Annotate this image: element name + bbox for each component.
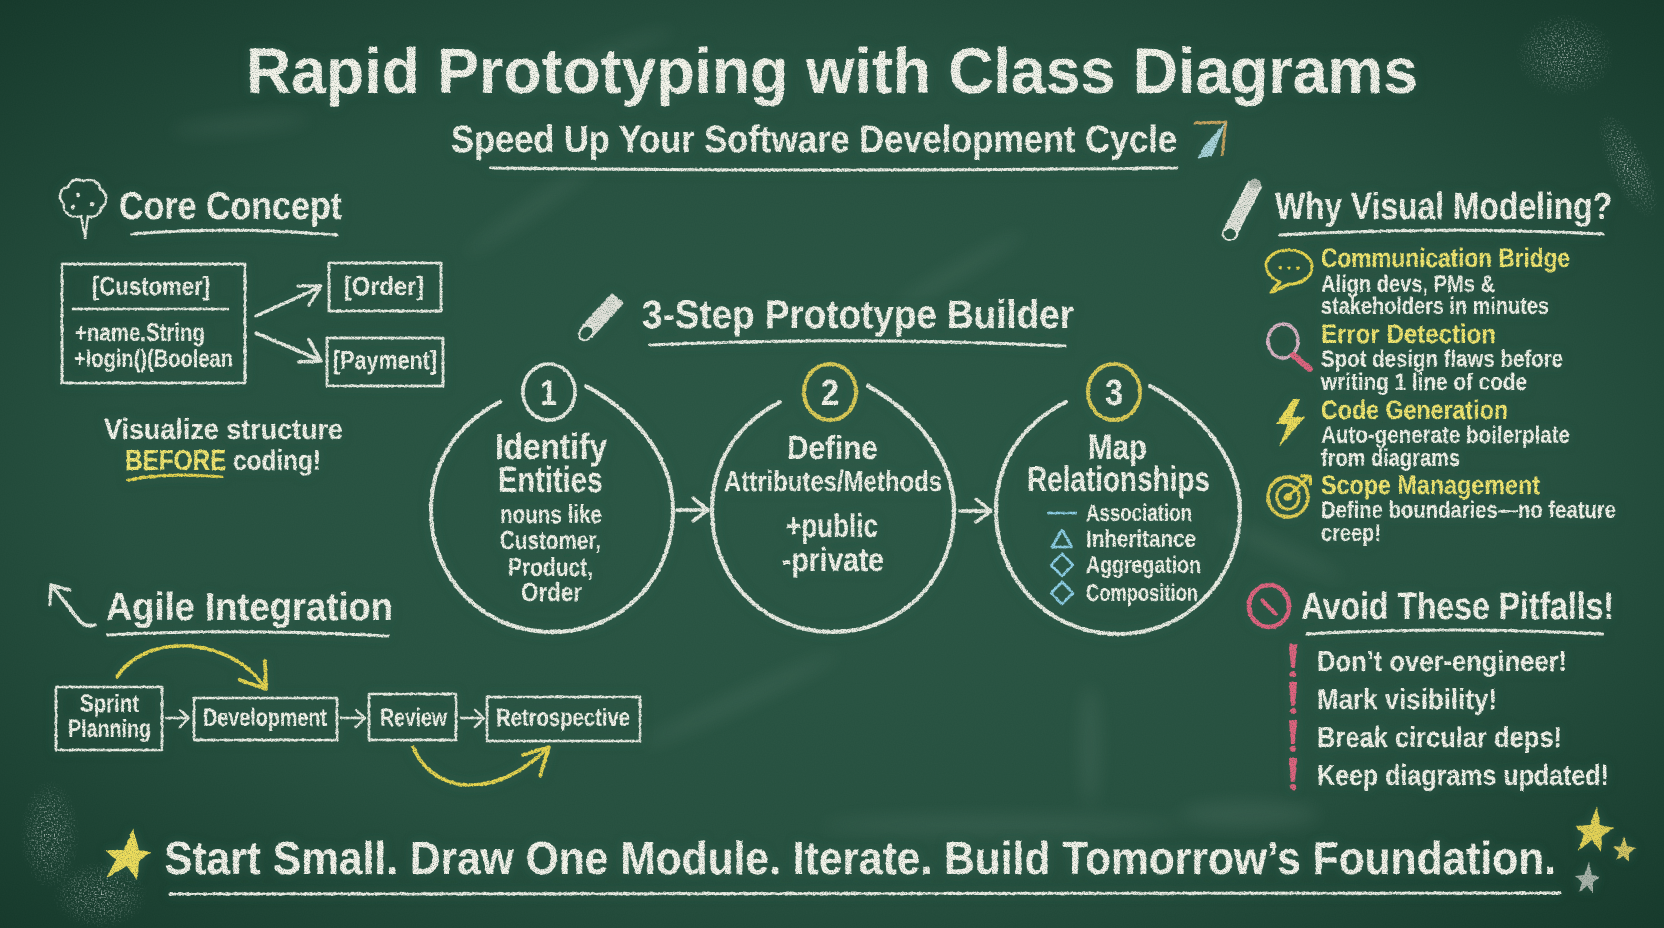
step 1 circle (431, 364, 673, 632)
arrow: customer to order (256, 286, 321, 316)
panel: agile integration (50, 585, 640, 785)
icon: speech bubble (1266, 250, 1312, 292)
arrow: customer to payment (256, 333, 321, 362)
item: communication bridge: Align devs, PMs & (1321, 271, 1495, 298)
heading: avoid these pitfalls: Avoid These Pitfalls! (1301, 586, 1614, 628)
box: retrospective (487, 697, 640, 741)
panel: why visual modeling (1223, 179, 1616, 547)
inheritance: Inheritance (1086, 526, 1196, 553)
icon: no sign (1249, 585, 1289, 627)
box: review (369, 694, 456, 740)
panel: core concept (60, 180, 443, 480)
icon: chalk pencil (1223, 179, 1261, 240)
step 3 title (1027, 428, 1210, 499)
class box: customer (62, 264, 245, 383)
badge 3: 3 (1105, 372, 1123, 413)
box: sprint planning (56, 687, 162, 750)
step 1 description: Customer, (500, 525, 601, 555)
curved arrow: review to retrospective (413, 747, 549, 785)
badge 2 (804, 364, 856, 420)
item: error detection (1268, 319, 1563, 396)
class box: payment (327, 338, 443, 386)
step 3 title: Relationships (1027, 460, 1210, 499)
badge 1: 1 (540, 372, 557, 413)
title: Rapid Prototyping with Class Diagrams (246, 35, 1418, 107)
step 1 title: Entities (498, 459, 603, 500)
text: visualize structure: Visualize structure (104, 414, 343, 446)
pitfall 2: Mark visibility! (1317, 684, 1497, 716)
item: error detection: Error Detection (1321, 319, 1496, 349)
step 1 description: Order (521, 577, 582, 607)
class box: order (329, 263, 441, 311)
arrow (166, 710, 189, 727)
icon: magnifying glass (1268, 324, 1310, 369)
footer message: Start Small. Draw One Module. Iterate. Build Tomorrow’s Foundation. (164, 832, 1556, 884)
item: communication bridge: stakeholders in minutes (1321, 293, 1549, 320)
pitfall 4: Keep diagrams updated! (1317, 760, 1609, 792)
arrow (341, 710, 365, 727)
step 2 circle (712, 364, 954, 632)
step 2 subtitle: Attributes/Methods (724, 466, 942, 498)
box: development: Development (203, 704, 328, 732)
yellow underline (128, 475, 222, 480)
arrow (461, 710, 484, 727)
item: code generation: from diagrams (1321, 445, 1460, 472)
aggregation: Aggregation (1086, 552, 1201, 579)
step 3 circle (996, 364, 1240, 634)
step 3 title: Map (1088, 428, 1147, 467)
footer underline (170, 893, 1560, 894)
heading underline (1280, 230, 1603, 235)
item: code generation: Auto-generate boilerplate (1321, 422, 1570, 449)
heading: 3-step prototype builder: 3-Step Prototype Builder (642, 293, 1074, 337)
item: error detection: writing 1 line of code (1320, 369, 1527, 396)
arrow: step 2 to 3 (960, 499, 991, 522)
badge 3 (1088, 364, 1140, 420)
box: development (194, 698, 337, 740)
icon: decorative stars (1575, 806, 1636, 893)
item: communication bridge: Communication Bridge (1321, 243, 1570, 273)
item: error detection: Spot design flaws before (1321, 346, 1563, 373)
panel: avoid these pitfalls (1249, 585, 1614, 792)
heading underline (132, 230, 337, 235)
box: retrospective: Retrospective (496, 704, 630, 732)
item: scope management (1268, 470, 1616, 547)
icon: return arrow (50, 585, 95, 626)
class box: customer: [Customer] (92, 271, 210, 301)
step 1 description: Product, (508, 552, 593, 582)
association: Association (1086, 500, 1192, 527)
step 1 title (495, 426, 607, 500)
icon: lightning bolt (1276, 399, 1305, 447)
icon: target (1268, 476, 1310, 517)
class box: payment: [Payment] (333, 345, 437, 375)
item: scope management: Define boundaries—no feature (1321, 497, 1616, 524)
pitfall 3: Break circular deps! (1317, 722, 1562, 754)
step 2 visibility: +public (786, 507, 878, 544)
class box: customer: +name.String (75, 319, 205, 347)
item: communication bridge (1266, 243, 1570, 320)
class box: customer: +login()(Boolean (74, 345, 233, 373)
heading underline (1307, 630, 1602, 634)
step 2 title: Define (787, 429, 878, 466)
composition: Composition (1086, 580, 1198, 607)
composition (1051, 580, 1198, 607)
box: review: Review (380, 704, 447, 732)
item: scope management: creep! (1321, 520, 1381, 547)
step 2 visibility (782, 507, 884, 578)
inheritance (1052, 526, 1196, 553)
step 2 visibility: -private (782, 541, 884, 578)
heading underline (108, 632, 388, 636)
box: sprint planning: Planning (68, 715, 151, 743)
badge 1 (523, 364, 575, 420)
text: before coding: BEFORE coding! (125, 445, 321, 477)
heading: agile integration: Agile Integration (106, 586, 393, 629)
item: code generation: Code Generation (1321, 395, 1508, 425)
step 1 description (500, 499, 602, 607)
icon: yellow star (105, 828, 151, 880)
badge 2: 2 (821, 372, 839, 413)
subtitle: Speed Up Your Software Development Cycle (451, 119, 1177, 161)
icon: tree idea (60, 180, 106, 238)
pitfall 1: Don’t over-engineer! (1317, 646, 1567, 678)
aggregation (1051, 552, 1201, 579)
item: scope management: Scope Management (1321, 470, 1540, 500)
curved arrow: planning to development (117, 646, 266, 689)
step 1 description: nouns like (500, 499, 602, 529)
icon: rocket arrow (1194, 122, 1226, 158)
heading underline (650, 341, 1065, 346)
step 1 title: Identify (495, 426, 607, 467)
icon: chalk stick (576, 293, 624, 343)
panel: 3-step prototype builder (431, 293, 1240, 634)
arrow: step 1 to 2 (677, 498, 708, 521)
item: code generation (1276, 395, 1570, 472)
panel: footer call to action (105, 806, 1636, 894)
box: sprint planning: Sprint (80, 690, 140, 718)
subtitle underline (490, 168, 1177, 170)
relationship legend (1047, 500, 1201, 607)
heading: core concept: Core Concept (119, 185, 342, 228)
class box: order: [Order] (344, 271, 424, 301)
